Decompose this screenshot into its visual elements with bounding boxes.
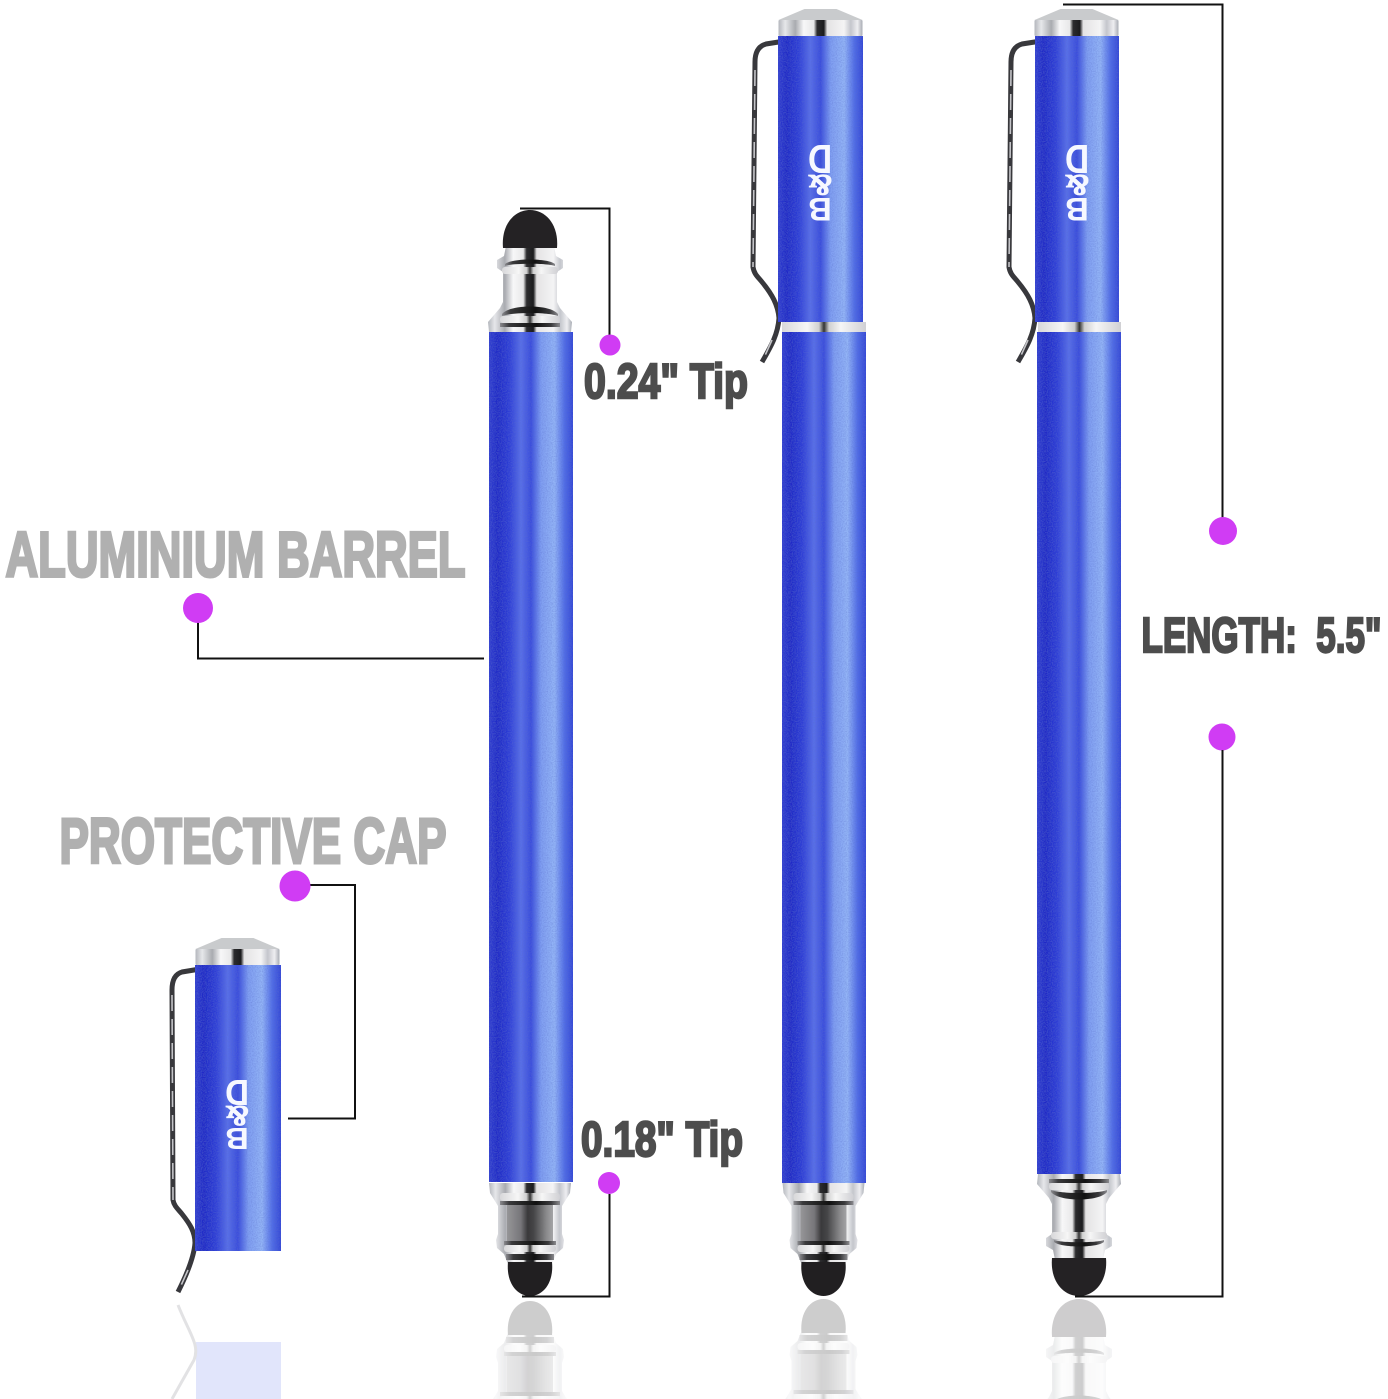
stylus 3 cap barrel <box>1035 36 1119 322</box>
label: 0.18 inch tip: 0.18" Tip <box>581 1113 743 1167</box>
dot: length top <box>1209 517 1237 545</box>
stylus 1 barrel <box>489 332 573 1182</box>
label: aluminium barrel: ALUMINIUM BARREL <box>6 518 466 590</box>
cap logo: & <box>224 1099 250 1132</box>
stylus 1: dual tip pen without cap <box>488 210 573 1296</box>
label: protective cap: PROTECTIVE CAP <box>60 805 446 877</box>
label: 0.24 inch tip: 0.24" Tip <box>584 355 748 409</box>
stylus 3 logo: B <box>1065 191 1089 227</box>
stylus 2 cap head <box>778 9 862 36</box>
dot: 0.24 inch tip <box>600 334 620 356</box>
stylus 3 logo <box>1064 136 1090 227</box>
stylus 2 tip <box>782 1183 864 1296</box>
leader line: protective cap <box>288 885 355 1118</box>
cap logo <box>224 1072 250 1156</box>
dot: length bottom <box>1208 724 1236 750</box>
leader line: 0.18 inch tip <box>522 1194 610 1296</box>
reflections of the stylus tips <box>489 1299 1121 1399</box>
cap barrel <box>195 965 281 1251</box>
stylus 1 upper tip <box>488 210 572 332</box>
stylus 2 logo: D <box>808 136 832 182</box>
stylus 2 logo: & <box>807 168 833 203</box>
leader line: length top <box>1063 4 1222 518</box>
stylus 2 ring <box>782 322 866 332</box>
leader line: aluminium barrel <box>198 622 484 658</box>
stylus 3: pen with cap and large tip <box>1009 9 1121 1296</box>
cap logo: D <box>225 1072 249 1111</box>
stylus 3 lower barrel <box>1037 332 1121 1174</box>
dot: aluminium barrel <box>183 593 213 623</box>
cap pocket clip <box>172 969 200 1292</box>
cap head <box>196 938 280 965</box>
dot: protective cap <box>280 870 310 902</box>
leader line: 0.24 inch tip <box>520 208 610 336</box>
stylus 3 logo: & <box>1064 168 1090 203</box>
leader line: length bottom <box>1075 750 1222 1296</box>
stylus 2 pocket clip <box>753 41 785 362</box>
stylus 3 ring <box>1038 322 1121 332</box>
stylus 2 cap barrel <box>778 36 863 322</box>
stylus 2 logo <box>807 136 833 227</box>
reflection of the protective cap <box>172 1305 281 1399</box>
protective cap <box>172 938 281 1292</box>
cap logo: B <box>225 1121 249 1156</box>
stylus 2: pen with cap <box>753 9 866 1296</box>
stylus 2 lower barrel <box>782 332 866 1183</box>
stylus 3 cap head <box>1034 9 1118 36</box>
dot: 0.18 inch tip <box>598 1172 620 1194</box>
stylus 3 pocket clip <box>1009 41 1041 362</box>
stylus 3 tip <box>1037 1174 1121 1296</box>
stylus 2 logo: B <box>808 191 832 227</box>
stylus 1 lower tip <box>489 1183 571 1296</box>
stylus 3 logo: D <box>1065 136 1089 182</box>
